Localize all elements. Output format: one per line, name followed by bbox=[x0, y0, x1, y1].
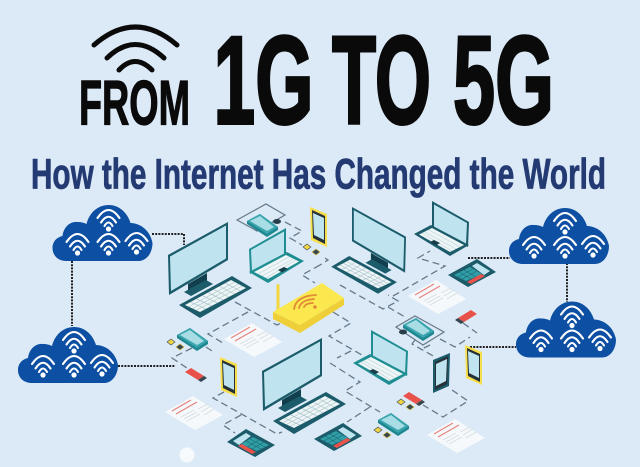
device: monitor bottom bbox=[262, 338, 322, 412]
paper lower left bbox=[165, 396, 223, 430]
icon: wifi above FROM bbox=[94, 27, 177, 70]
device: tablet left bbox=[177, 328, 208, 351]
paper upper left bbox=[224, 323, 282, 357]
device: chips top bbox=[303, 244, 320, 255]
title: 1G TO 5G: 1G bbox=[214, 12, 314, 150]
white dot bbox=[180, 448, 194, 462]
device: calculator bottom bbox=[314, 423, 362, 451]
device: tablet bottom bbox=[378, 413, 409, 436]
device: calculator lower left bbox=[227, 429, 275, 457]
device: monitor left bbox=[168, 222, 228, 296]
device: chips bottom middle bbox=[397, 399, 414, 410]
title: 1G TO 5G: 5G bbox=[453, 12, 554, 150]
cloud: top left bbox=[52, 205, 152, 261]
device: laptop dark top right bbox=[414, 201, 469, 256]
device: monitor right bbox=[352, 207, 406, 274]
cloud: bottom left bbox=[18, 327, 118, 383]
device: router bbox=[273, 283, 344, 333]
device: keyboard bottom bbox=[273, 392, 346, 434]
cloud: bottom right bbox=[516, 302, 616, 358]
device: tablet with cable, top bbox=[237, 204, 285, 237]
dashed network lines bbox=[172, 222, 477, 434]
device: usb bottom bbox=[403, 392, 425, 406]
device: keyboard right bbox=[331, 256, 397, 294]
device: phone yellow top bbox=[310, 207, 327, 247]
title: 1G TO 5G: TO bbox=[332, 12, 431, 150]
device: phone dark bbox=[433, 353, 450, 393]
device: keyboard left bbox=[179, 276, 252, 318]
paper upper right bbox=[408, 280, 466, 314]
device: usb right bbox=[455, 310, 477, 324]
device: tablet with cable, right bbox=[396, 316, 444, 345]
cloud: top right bbox=[509, 208, 609, 264]
device: calculator right bbox=[448, 259, 496, 287]
device: laptop teal lower bbox=[353, 330, 408, 385]
title: FROM: FROM bbox=[79, 68, 190, 138]
device: chips left bbox=[167, 339, 184, 350]
device: usb left bbox=[185, 368, 207, 382]
dotted cloud connectors bbox=[72, 234, 567, 366]
device: laptop teal upper bbox=[249, 228, 304, 283]
paper lower right bbox=[427, 419, 485, 453]
device: phone yellow right bbox=[465, 345, 482, 385]
device: phone yellow left bbox=[220, 357, 237, 397]
title: 1G TO 5G bbox=[214, 12, 554, 150]
device: chips bottom bbox=[374, 427, 391, 438]
